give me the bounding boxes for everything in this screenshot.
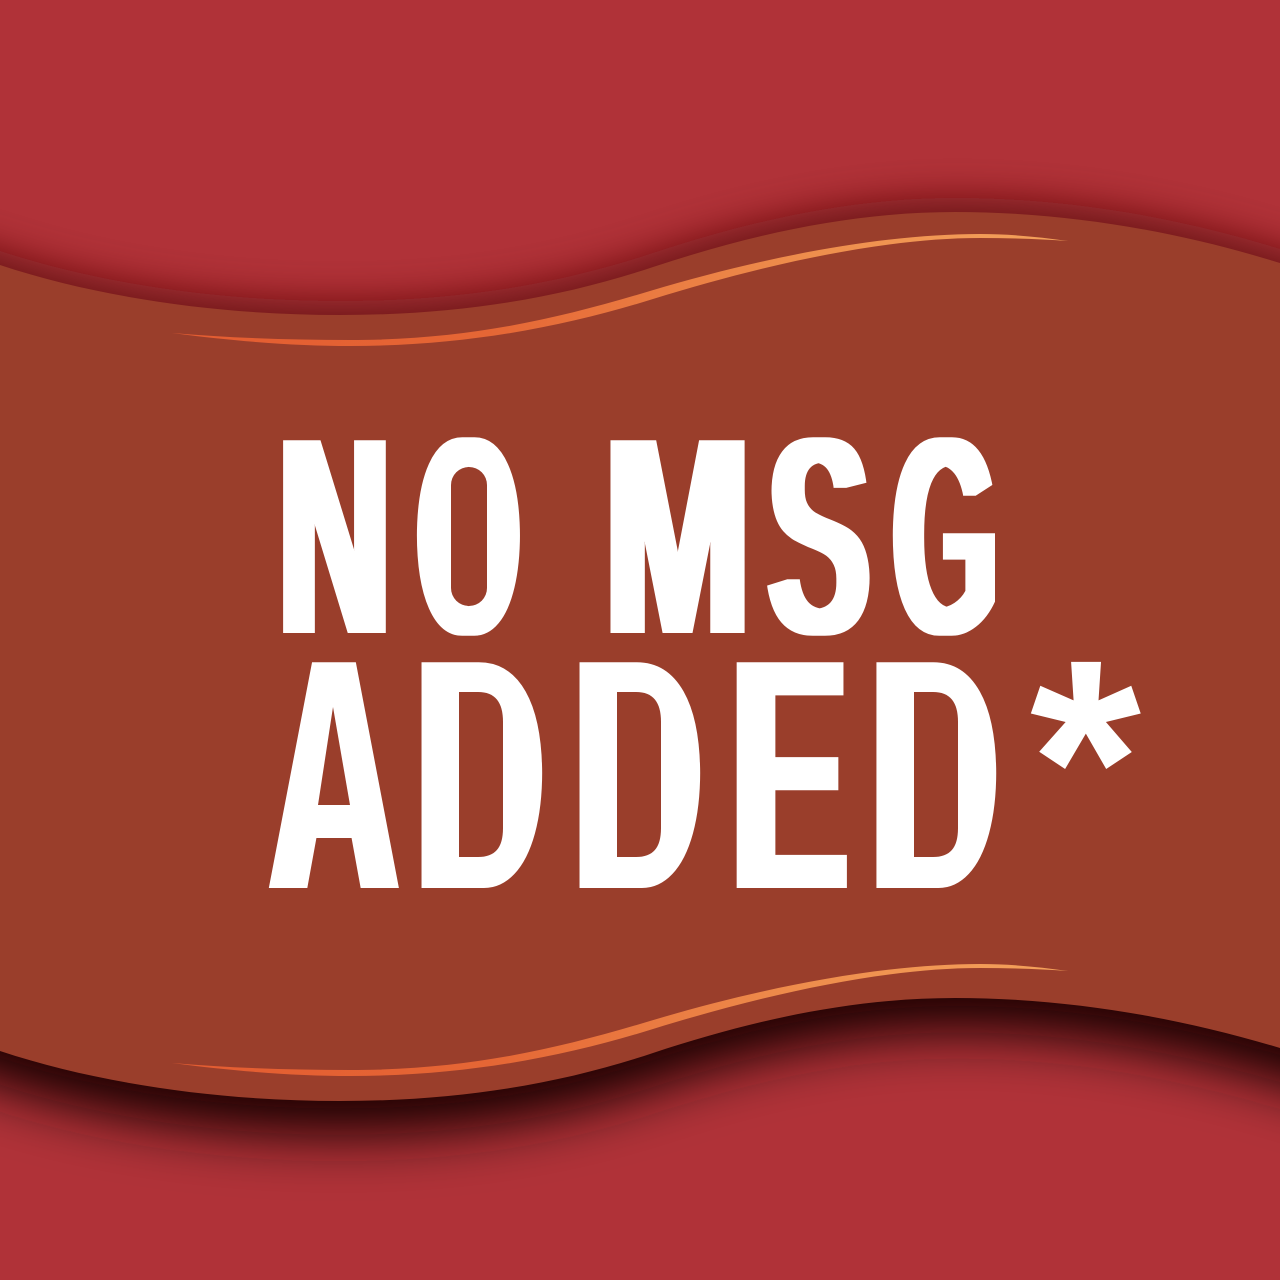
bottom orange highlight swoosh <box>172 964 1068 1076</box>
headline: G <box>893 376 997 696</box>
asterisk: * <box>1030 600 1141 922</box>
headline line 2: D <box>575 588 700 961</box>
headline line 2: E <box>732 588 847 961</box>
headline line 1: M <box>605 376 750 696</box>
shadow below band <box>0 734 1280 1135</box>
headline line 1: S <box>768 376 870 696</box>
headline line 2: D <box>417 588 542 961</box>
brown wave band <box>0 212 1280 1101</box>
headline line 1: N <box>279 376 390 696</box>
headline <box>271 376 1141 961</box>
top orange highlight swoosh <box>172 234 1068 346</box>
headline line 2: D <box>872 588 996 961</box>
shadow above band <box>0 198 1280 586</box>
headline line 2: A <box>271 588 397 961</box>
headline line 1: O <box>418 376 520 696</box>
